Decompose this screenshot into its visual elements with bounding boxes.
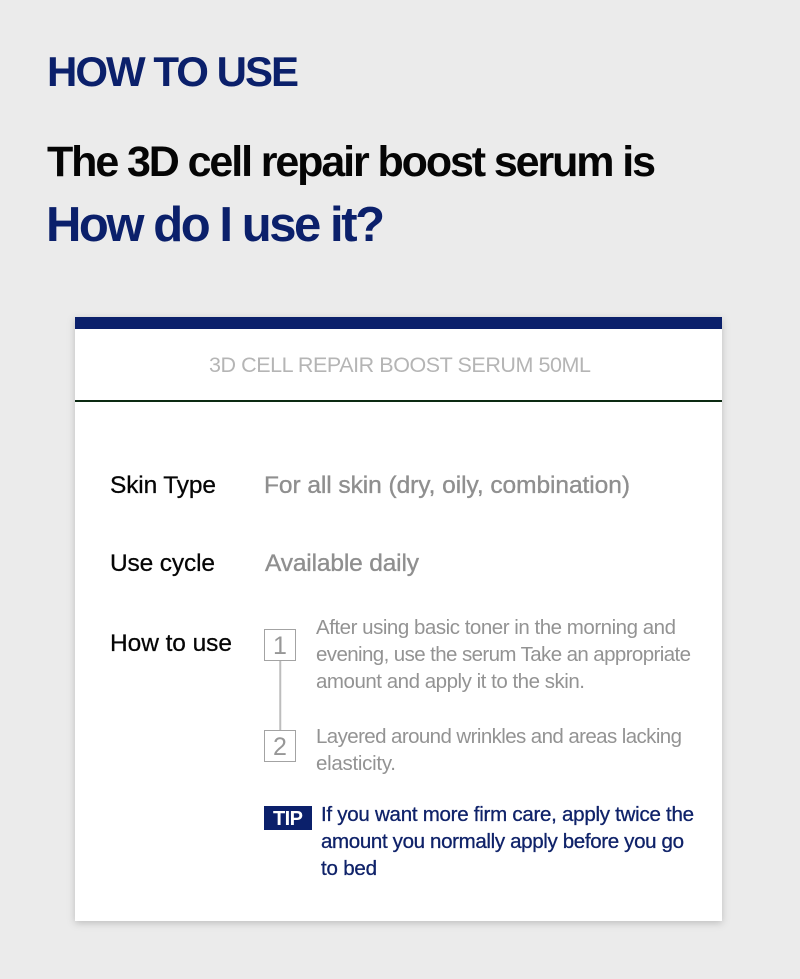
step 1 number box [264,630,296,660]
step 2 text [316,725,682,775]
tip text: to bed [321,857,377,880]
step 1 text: amount and apply it to the skin. [316,670,585,693]
row: use cycle [110,550,420,577]
step 2 number box: 2 [273,733,287,761]
row label: how to use: How to use [110,630,232,657]
step 1 text [316,616,691,693]
row: use cycle: Use cycle [110,550,215,577]
step 2 text: Layered around wrinkles and areas lacking [316,725,682,748]
tip text [321,803,694,880]
section label: how to use: HOW TO USE [47,48,299,95]
heading: line two: How do I use it? [46,198,385,252]
heading: line one: The 3D cell repair boost serum is [47,138,656,186]
step 2 number box [264,730,296,762]
row: skin type: For all skin (dry, oily, combination) [264,472,630,499]
card title: 3D CELL REPAIR BOOST SERUM 50ML [209,353,591,377]
row: skin type: Skin Type [110,472,216,499]
card background [75,317,722,921]
step 2 text: elasticity. [316,752,396,775]
tip text: amount you normally apply before you go [321,830,684,853]
tip text: If you want more firm care, apply twice the [321,803,694,826]
card top bar [75,317,722,329]
tip badge: TIP [273,808,303,830]
panel: product usage card [75,317,722,921]
step connector line [279,661,281,730]
tip badge [264,806,312,830]
step 1 text: After using basic toner in the morning and [316,616,676,639]
row: use cycle: Available daily [265,550,420,577]
step 1 text: evening, use the serum Take an appropriate [316,643,691,666]
step 1 number box: 1 [273,632,287,660]
